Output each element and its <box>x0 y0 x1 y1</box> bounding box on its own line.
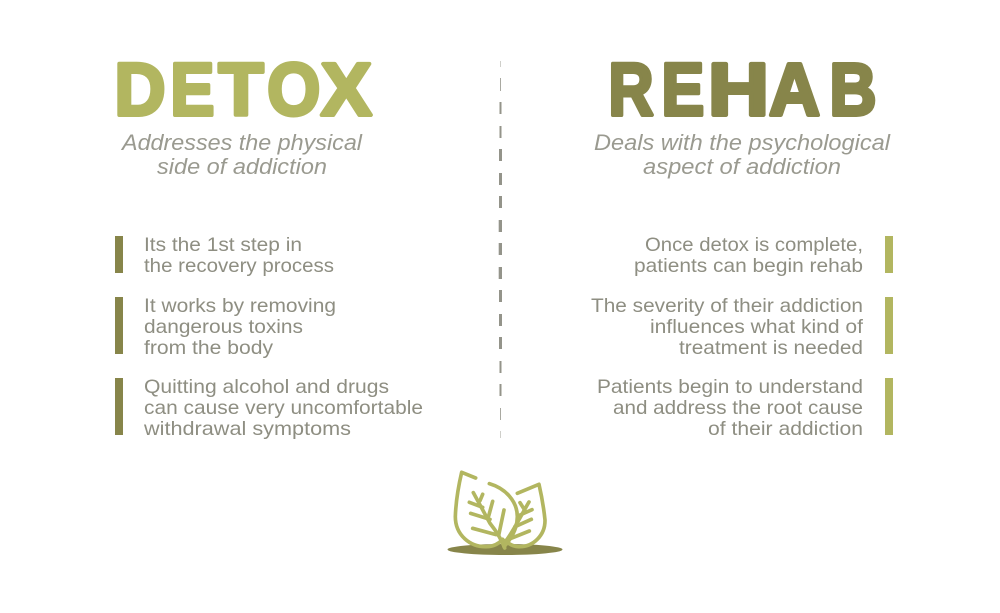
marker bar: detox point 3 <box>115 378 123 435</box>
subtitle: detox: side of addiction <box>157 154 327 179</box>
subtitle: detox <box>120 130 363 179</box>
text: detox point 3: can cause very uncomfortable <box>144 397 423 419</box>
text: rehab point 3: Patients begin to understand <box>597 376 863 398</box>
heading: DETOX: E <box>170 48 214 131</box>
text: rehab point 2: influences what kind of <box>650 316 864 338</box>
text: rehab point 2: treatment is needed <box>679 337 863 359</box>
subtitle: detox: Addresses the physical <box>120 130 363 155</box>
marker bar: rehab point 1 <box>885 236 893 273</box>
subtitle: rehab <box>594 130 891 179</box>
icon: leaf outlines and veins <box>455 472 545 548</box>
text: detox point 2: from the body <box>144 337 273 359</box>
heading: DETOX: D <box>114 48 166 131</box>
text: detox point 1: Its the 1st step in <box>144 234 302 256</box>
heading: DETOX: T <box>218 48 264 131</box>
text: detox point 2: dangerous toxins <box>144 316 303 338</box>
text: detox point 2 <box>144 295 336 359</box>
heading: DETOX: X <box>321 48 372 131</box>
text: rehab point 3: and address the root cause <box>613 397 863 419</box>
dashed divider <box>499 61 502 438</box>
marker bar: rehab point 3 <box>885 378 893 435</box>
text: rehab point 1: Once detox is complete, <box>645 234 863 256</box>
text: rehab point 2: The severity of their addiction <box>591 295 863 317</box>
panel: detox <box>114 48 423 440</box>
subtitle: rehab: aspect of addiction <box>643 154 841 179</box>
text: detox point 3: withdrawal symptoms <box>143 418 351 440</box>
icon: ground shadow <box>448 544 562 555</box>
marker bar: detox point 1 <box>115 236 123 273</box>
heading: REHAB: H <box>708 48 769 131</box>
heading: REHAB: R <box>608 48 654 131</box>
heading: REHAB: B <box>830 48 876 131</box>
text: rehab point 2 <box>591 295 864 359</box>
text: rehab point 3: of their addiction <box>708 418 863 440</box>
heading: DETOX <box>114 48 372 131</box>
text: rehab point 1: patients can begin rehab <box>634 255 863 277</box>
marker bar: rehab point 2 <box>885 297 893 354</box>
heading: REHAB: E <box>662 48 704 131</box>
text: detox point 1: the recovery process <box>144 255 334 277</box>
heading: DETOX: O <box>267 48 320 131</box>
panel: rehab <box>591 48 893 440</box>
subtitle: rehab: Deals with the psychological <box>594 130 891 155</box>
text: rehab point 3 <box>597 376 863 440</box>
text: rehab point 1 <box>634 234 863 277</box>
marker bar: detox point 2 <box>115 297 123 354</box>
heading: REHAB: A <box>769 48 820 131</box>
text: detox point 1 <box>144 234 334 277</box>
text: detox point 3: Quitting alcohol and drugs <box>144 376 389 398</box>
icon: leaves on ground <box>448 472 562 555</box>
text: detox point 3 <box>143 376 423 440</box>
text: detox point 2: It works by removing <box>144 295 336 317</box>
heading: REHAB <box>608 48 876 131</box>
